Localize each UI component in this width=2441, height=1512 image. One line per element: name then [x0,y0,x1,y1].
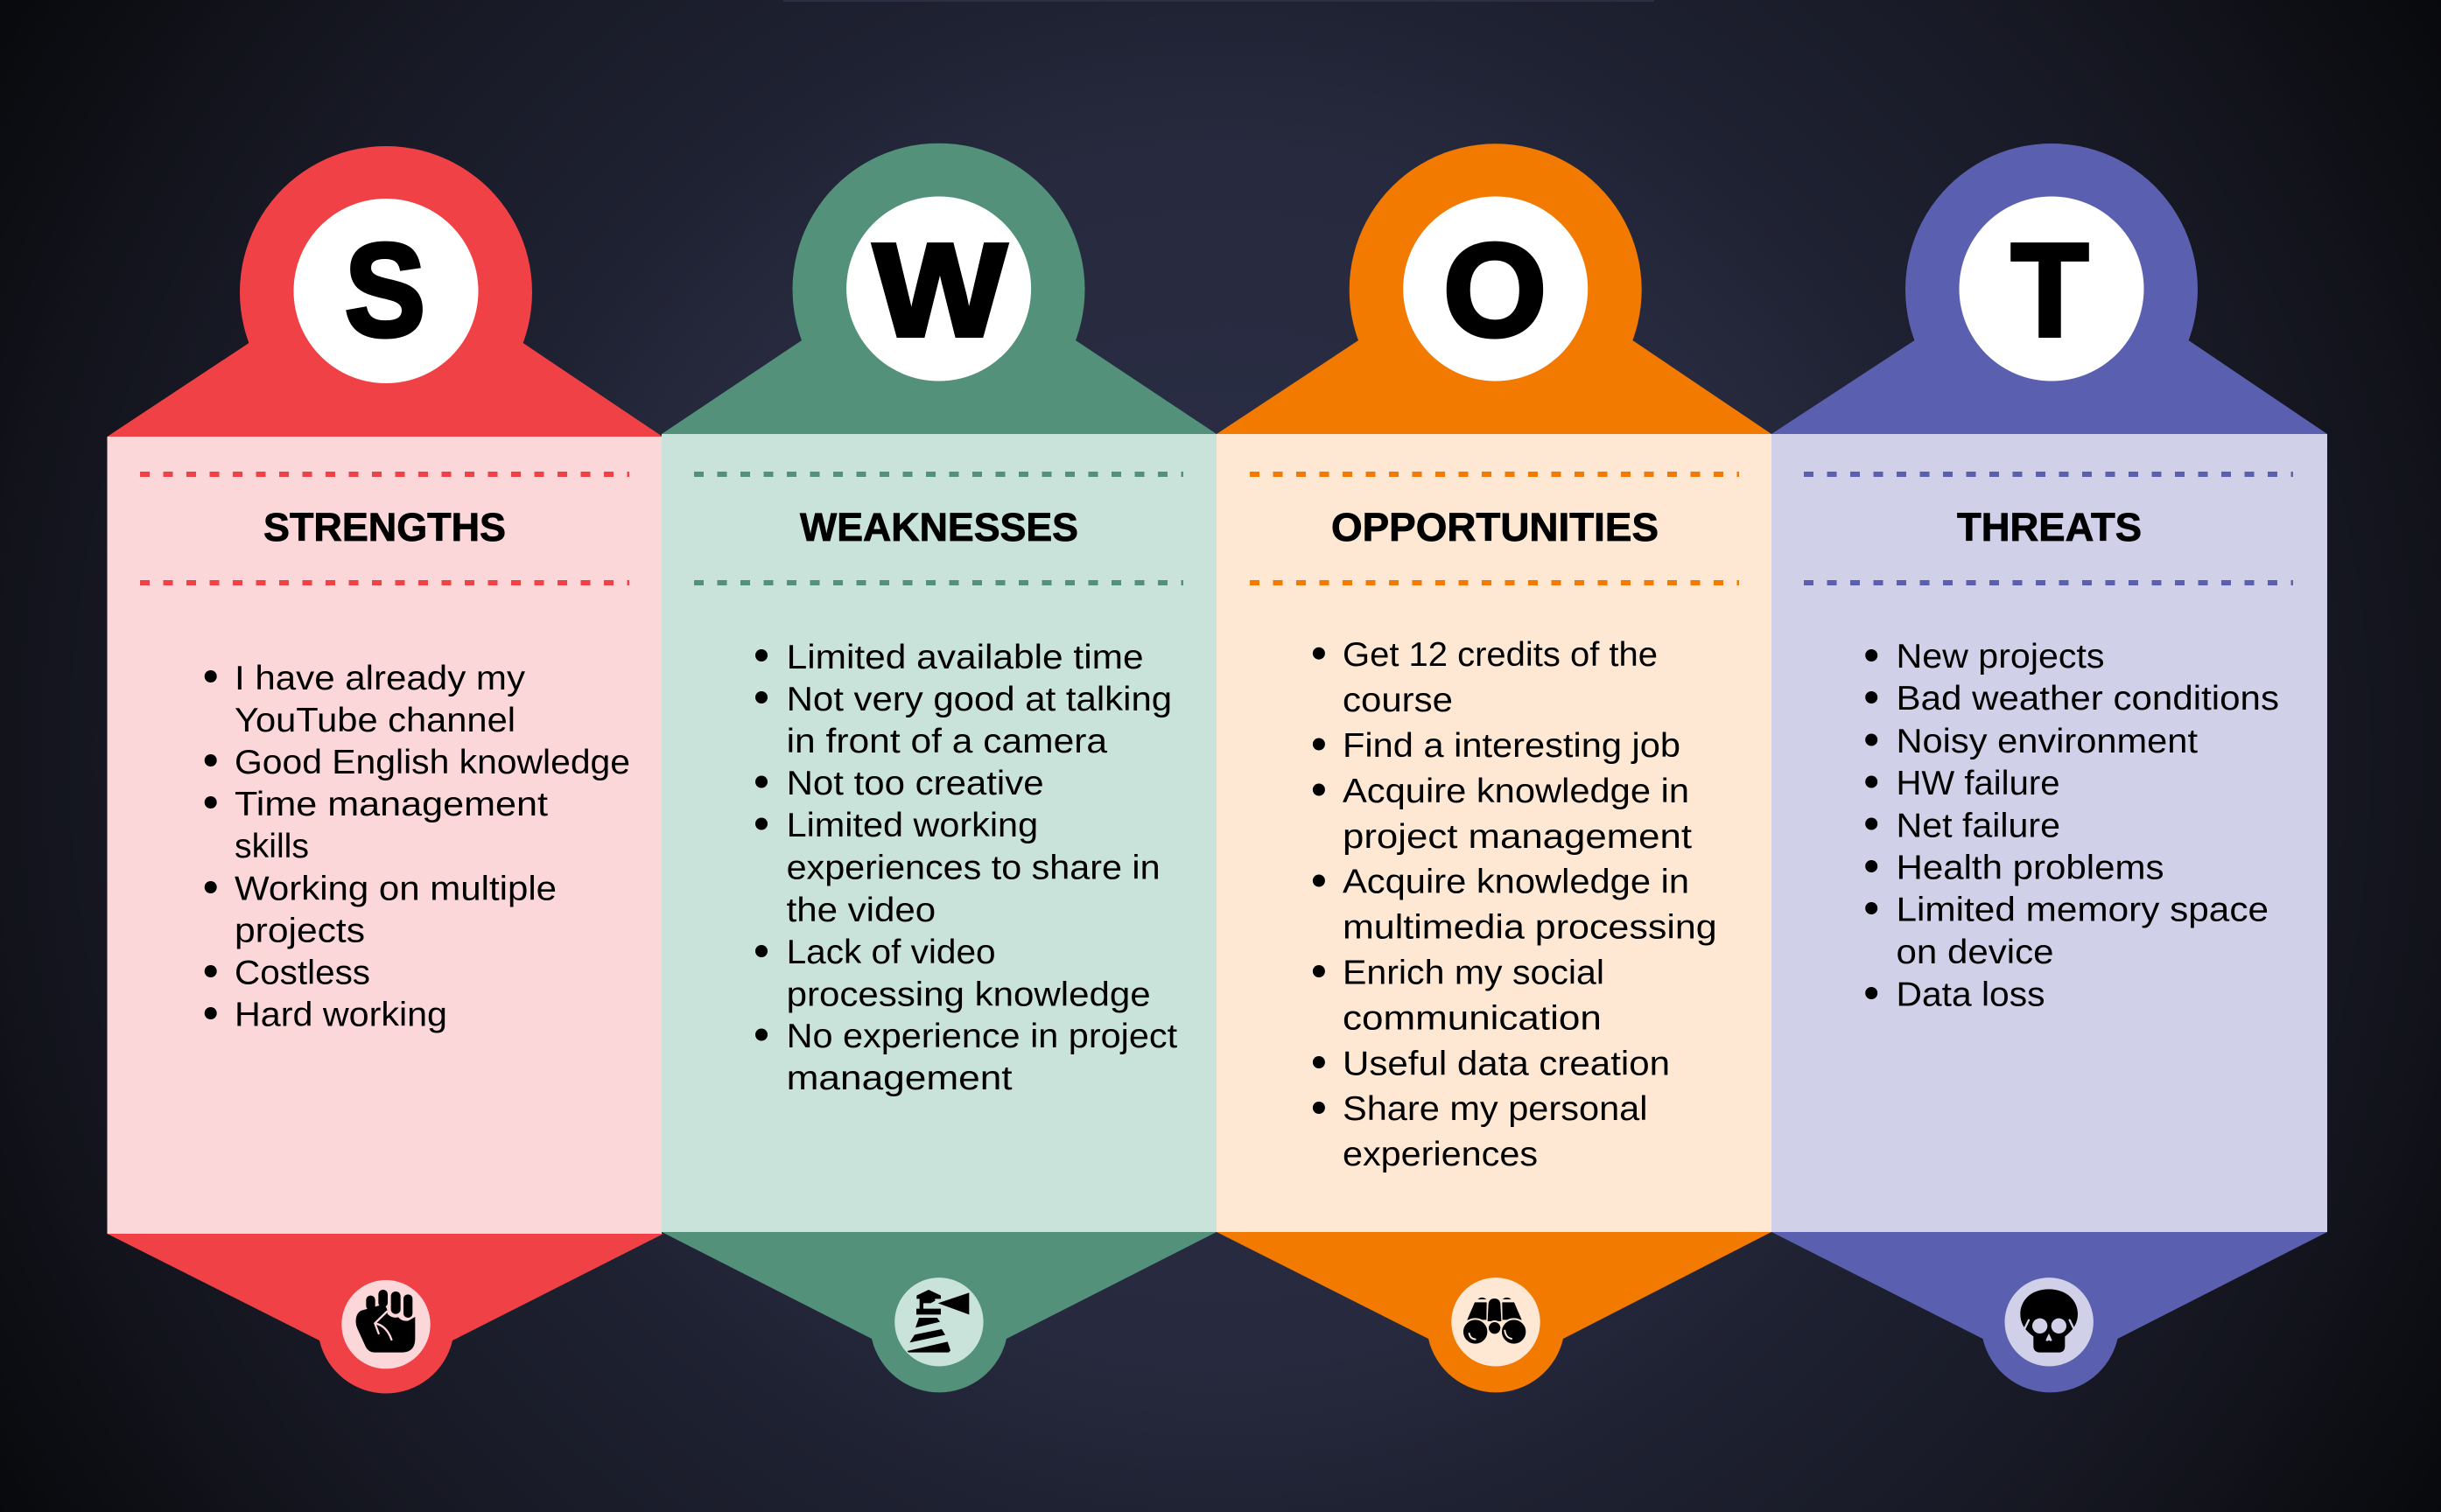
bullet list: threats: Limited memory space [1896,892,2269,929]
panel body: threats [1771,434,2327,1232]
panel: threats [1771,144,2327,1392]
bullet list: opportunities: Find a interesting job [1343,727,1680,765]
bullet list: opportunities: multimedia processing [1343,909,1717,947]
bullet list: strengths: skills [235,828,309,865]
bullet list: threats [1865,638,2279,1013]
letter badge: S [294,199,478,383]
bullet list: threats: Health problems [1896,849,2164,886]
bullet list: threats: New projects [1896,638,2104,676]
heading: threats: THREATS [1957,505,2142,550]
bullet list: strengths: Working on multiple [235,870,557,908]
bullet list: weaknesses: experiences to share in [787,849,1161,887]
header tab: opportunities [1217,144,1771,434]
header tab: strengths [107,146,663,437]
icon: fist [341,1280,431,1368]
bullet list: threats: on device [1896,934,2053,971]
footer tab: threats [1771,1232,2327,1392]
bullet list: strengths: Time management [235,786,548,823]
bullet list: weaknesses [755,639,1177,1097]
icon: skull [2004,1278,2094,1367]
bullet list: weaknesses: Not very good at talking [787,681,1172,718]
bullet list: opportunities: course [1343,682,1453,719]
bullet list: strengths [205,660,630,1034]
bullet list: strengths: Hard working [235,996,447,1034]
icon: binoculars [1451,1278,1540,1367]
bullet list: weaknesses: in front of a camera [787,723,1107,760]
bullet list: weaknesses: management [787,1060,1013,1097]
letter badge: T [1959,196,2144,382]
footer tab: weaknesses [662,1232,1217,1392]
bullet list: opportunities: Get 12 credits of the [1343,636,1658,674]
panel: opportunities [1217,144,1771,1392]
bullet list: opportunities: experiences [1343,1136,1538,1173]
bullet list: opportunities: Share my personal [1343,1090,1647,1128]
letter badge: S: S [345,215,425,364]
bullet list: strengths: I have already my [235,660,526,697]
bullet list: strengths: Good English knowledge [235,744,630,781]
header tab: threats [1771,144,2327,434]
heading: weaknesses: WEAKNESSES [800,505,1078,550]
bullet list: weaknesses: Lack of video [787,934,996,971]
bullet list: strengths: YouTube channel [235,702,516,739]
letter badge: W: W [873,215,1007,364]
icon: lighthouse [894,1278,984,1367]
letter badge: T: T [2011,215,2088,364]
footer tab: opportunities [1217,1232,1771,1392]
bullet list: weaknesses: the video [787,892,936,929]
bullet list: strengths: Costless [235,954,370,992]
panel body: weaknesses [662,434,1217,1232]
header tab: weaknesses [662,144,1217,434]
panel body: strengths [107,437,662,1234]
bullet list: weaknesses: processing knowledge [787,976,1151,1013]
bullet list: threats: Data loss [1896,976,2045,1013]
bullet list: weaknesses: Not too creative [787,765,1044,802]
heading: strengths: STRENGTHS [263,505,506,550]
letter badge: W [846,196,1031,382]
bullet list: weaknesses: No experience in project [787,1018,1177,1055]
bullet list: opportunities: Enrich my social [1343,954,1604,992]
panel: strengths [107,146,663,1393]
bullet list: opportunities [1313,636,1717,1173]
bullet list: opportunities: communication [1343,999,1602,1037]
bullet list: threats: HW failure [1896,765,2060,802]
bullet list: opportunities: project management [1343,818,1692,856]
letter badge: O: O [1443,215,1547,364]
bullet list: threats: Bad weather conditions [1896,680,2279,718]
bullet list: weaknesses: Limited available time [787,639,1144,676]
bullet list: opportunities: Acquire knowledge in [1343,773,1689,810]
bullet list: weaknesses: Limited working [787,807,1038,844]
bullet list: threats: Net failure [1896,807,2060,844]
panel body: opportunities [1217,434,1771,1232]
bullet list: opportunities: Acquire knowledge in [1343,864,1689,901]
bullet list: strengths: projects [235,912,365,950]
bullet list: opportunities: Useful data creation [1343,1045,1670,1082]
letter badge: O [1403,196,1588,382]
heading: opportunities: OPPORTUNITIES [1331,505,1659,550]
bullet list: threats: Noisy environment [1896,723,2198,760]
footer tab: strengths [107,1234,663,1393]
panel: weaknesses [662,144,1217,1392]
